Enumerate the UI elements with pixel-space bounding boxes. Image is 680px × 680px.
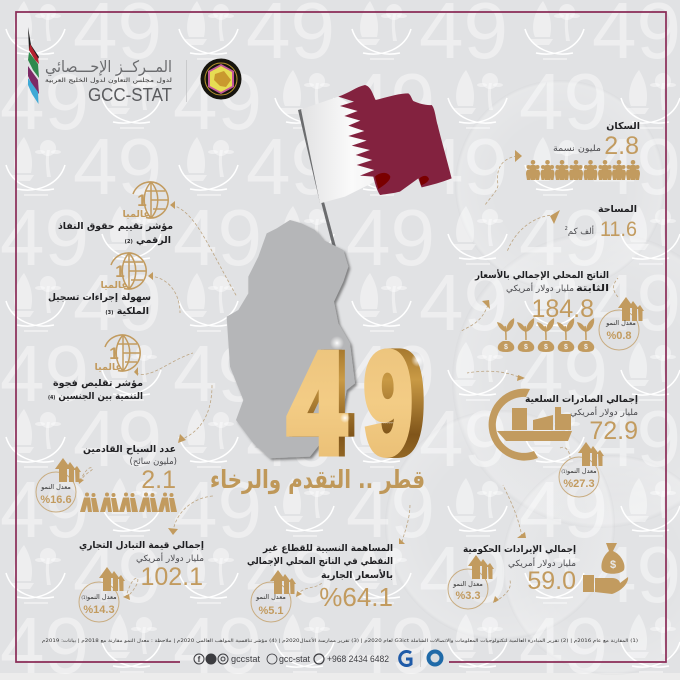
big gold number 49: 4 [291, 324, 349, 483]
unit: مليون نسمة [553, 144, 601, 154]
label: التنمية بين الجنسين (4) [48, 391, 143, 402]
panel: trade value [79, 540, 204, 622]
panel: merchandise exports [489, 389, 638, 497]
label: مؤشر تقييم حقوق النفاذ [58, 221, 173, 232]
growth badge: %16.6 [40, 494, 72, 506]
icon: TUV certification [426, 650, 444, 666]
unit: مليار دولار أمريكي [508, 557, 576, 569]
icon: twitter [206, 654, 216, 664]
unit: 2 [565, 226, 568, 232]
unit: مليار دولار أمريكي [136, 552, 204, 564]
growth badge [599, 297, 644, 350]
icon: cargo ship [489, 389, 572, 461]
value: 59.0 [527, 567, 576, 595]
label: سهولة إجراءات تسجيل [48, 292, 151, 303]
icon: G logo [400, 652, 411, 666]
big gold number 49 [288, 324, 425, 483]
icon: globe rank 1 [123, 182, 168, 220]
big gold number 49: 9 [370, 324, 418, 482]
heading: الثابتة [576, 283, 609, 294]
icon: money plants: $ [504, 344, 508, 351]
icon: GCC emblem [200, 58, 242, 100]
panel: government revenue [448, 543, 628, 609]
handle gcc-stat: gcc-stat [279, 654, 310, 664]
phone number: +968 2434 6482 [327, 654, 389, 664]
growth badge [79, 567, 125, 622]
social contact bar [194, 650, 444, 667]
heading: النفطي في الناتج المحلي الإجمالي [247, 556, 393, 567]
panel: constant-price GDP [474, 269, 644, 352]
growth badge [251, 570, 296, 622]
label: الرقمي (2) [125, 235, 171, 246]
icon: money plants [497, 318, 594, 352]
growth badge: %0.8 [606, 330, 632, 342]
panel: area [565, 204, 637, 241]
unit: (مليون سائح) [130, 457, 177, 467]
flag maroon field [338, 85, 452, 195]
icon: globe rank 1 [101, 253, 146, 291]
logo ribbon [28, 27, 39, 104]
heading: إجمالي الصادرات السلعية [525, 394, 638, 405]
logo Arabic name: المــركــز الإحـــصائي [45, 57, 172, 77]
icon: money plants: $ [564, 344, 568, 351]
value: 72.9 [589, 417, 638, 445]
value: %64.1 [319, 582, 393, 612]
big gold number 49: 9 [372, 324, 420, 482]
heading: المساهمة النسبية للقطاع غير [262, 543, 393, 554]
icon: globe rank 1: عالميا [95, 362, 122, 373]
heading: الناتج المحلي الإجمالي بالأسعار [474, 269, 609, 281]
icon: globe rank 1: عالميا [101, 280, 128, 291]
icon: money plants: $ [544, 344, 548, 351]
GCC-STAT logo [28, 27, 242, 105]
value: 184.8 [531, 295, 594, 323]
icon: whatsapp [314, 654, 324, 664]
tagline: قطر .. التقدم والرخاء [210, 465, 425, 495]
panel: non-oil share [247, 543, 393, 622]
logo subtitle: لدول مجلس التعاون لدول الخليج العربية [45, 77, 172, 84]
growth badge [448, 555, 494, 609]
panel: tourist arrivals [36, 444, 177, 512]
growth badge [559, 442, 604, 497]
value: 2.8 [604, 132, 639, 160]
Qatar flag [298, 85, 452, 248]
logo GCC-STAT: GCC-STAT [88, 85, 172, 105]
icon: globe rank 1: 1 [137, 191, 147, 210]
big gold number 49: 9 [366, 324, 414, 482]
growth badge: معدل النمو(1) [81, 593, 117, 601]
big gold number 49: 9 [376, 324, 424, 482]
growth badge: %27.3 [563, 478, 595, 490]
icon: families [526, 160, 640, 180]
icon: person [267, 654, 277, 664]
panel: gender gap [48, 335, 143, 402]
panel: population [526, 121, 640, 180]
growth badge: معدل النمو(1) [561, 467, 597, 475]
dashed connector arrows [78, 150, 618, 603]
heading [247, 543, 393, 581]
value: 102.1 [140, 563, 203, 591]
label: مؤشر تقليص فجوة [53, 378, 143, 389]
growth badge: %14.3 [83, 604, 115, 616]
icon: instagram [218, 654, 228, 664]
heading: المساحة [598, 204, 637, 215]
icon: globe rank 1: 1 [115, 262, 125, 281]
heading [474, 269, 609, 294]
heading: عدد السياح القادمين [83, 444, 176, 455]
heading: إجمالي الإيرادات الحكومية [463, 544, 576, 555]
label [48, 378, 143, 402]
icon: globe rank 1: 1 [109, 344, 119, 363]
value: 2.1 [141, 466, 176, 494]
value: 11.6 [600, 218, 637, 241]
big gold number 49: 9 [368, 324, 416, 482]
label [58, 221, 173, 246]
heading: السكان [606, 121, 640, 132]
icon: tourists [80, 492, 177, 512]
growth badge: %5.1 [258, 605, 284, 617]
growth badge [36, 458, 81, 512]
big gold number 49: 4 [288, 324, 346, 483]
panel: digital rights index [58, 182, 173, 246]
unit: ألف كم [568, 227, 594, 237]
growth badge: معدل النمو [605, 319, 636, 327]
heading: إجمالي قيمة التبادل التجاري [79, 540, 204, 551]
growth badge: معدل النمو [452, 580, 483, 588]
big gold number 49: 9 [364, 324, 412, 482]
heading: بالأسعار الجارية [321, 569, 393, 581]
flag white band [301, 97, 385, 203]
icon: facebook [194, 654, 204, 664]
growth badge: معدل النمو [40, 483, 71, 491]
icon: facebook: f [198, 655, 201, 664]
unit: مليار دولار أمريكي [570, 406, 638, 418]
handle gccstat: gccstat [231, 654, 261, 664]
big gold number 49: 4 [294, 324, 352, 483]
big gold number 49: 9 [374, 324, 422, 482]
Qatar map [227, 220, 355, 458]
icon: hand with money bag [583, 543, 628, 594]
growth badge: %3.3 [455, 590, 481, 602]
label: الملكية (3) [105, 306, 149, 317]
icon: money plants: $ [524, 344, 528, 351]
icon: globe rank 1: عالميا [123, 209, 150, 220]
icon: money plants: $ [584, 344, 588, 351]
label [48, 292, 151, 317]
unit: مليار دولار أمريكي [506, 282, 574, 294]
panel: property registration [48, 253, 151, 317]
footnotes: (1) المقارنة مع عام 2016م | (2) تقرير المبادرة العالمية لتكنولوجيات المعلومات والاتصالات الشاملة G3ict لعام 2020م | (3) تقرير ممارسة الأعمال2020م | (4) مؤشر تنافسية المواهب العالمي 2020م | ملاحظة : معدل النمو مقارنة مع 2018م | بيانات: 2019م [42, 637, 638, 644]
icon: hand with money bag: $ [610, 559, 616, 571]
icon: globe rank 1 [95, 335, 140, 373]
growth badge: معدل النمو [255, 593, 286, 601]
